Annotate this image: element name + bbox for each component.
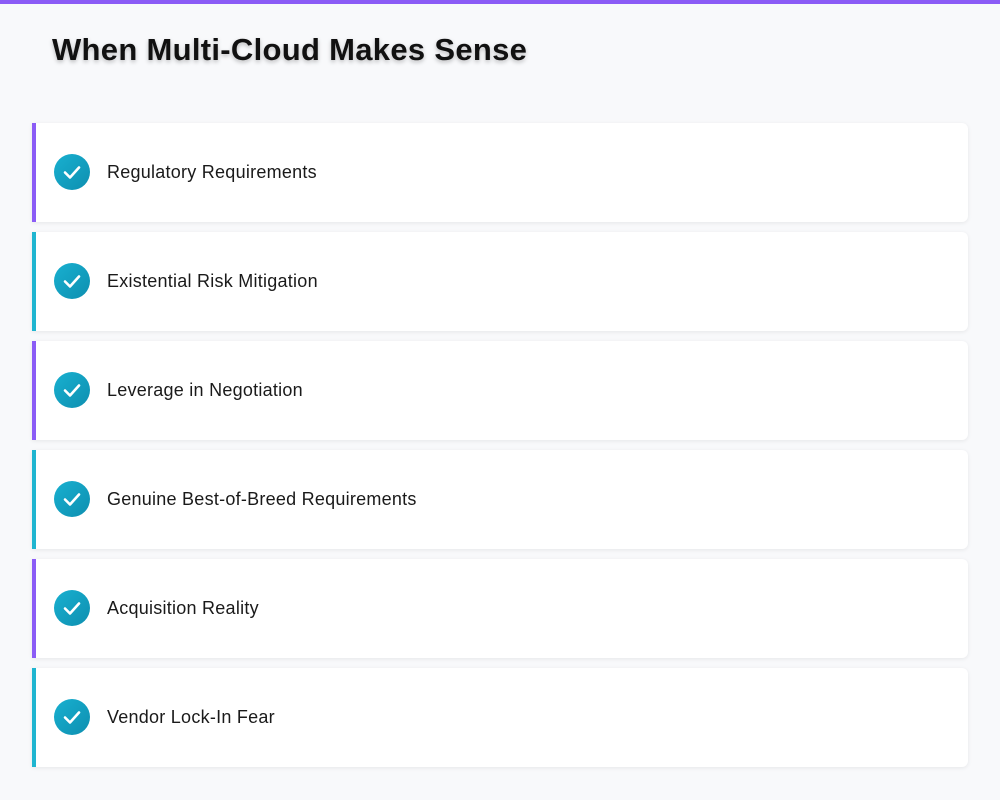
card: acquisition: Acquisition Reality bbox=[107, 598, 259, 618]
card: regulatory: Regulatory Requirements bbox=[107, 162, 317, 182]
card: regulatory bbox=[32, 123, 968, 222]
card: existential bbox=[32, 232, 968, 331]
title: When Multi-Cloud Makes Sense bbox=[52, 32, 527, 67]
card: leverage: Leverage in Negotiation bbox=[107, 380, 303, 400]
card: best-of-breed: Genuine Best-of-Breed Requirements bbox=[107, 489, 417, 509]
card: acquisition bbox=[32, 559, 968, 658]
card: existential: Existential Risk Mitigation bbox=[107, 271, 318, 291]
card: lock-in bbox=[32, 668, 968, 767]
card: best-of-breed bbox=[32, 450, 968, 549]
card: lock-in: Vendor Lock-In Fear bbox=[107, 707, 275, 727]
card: leverage bbox=[32, 341, 968, 440]
